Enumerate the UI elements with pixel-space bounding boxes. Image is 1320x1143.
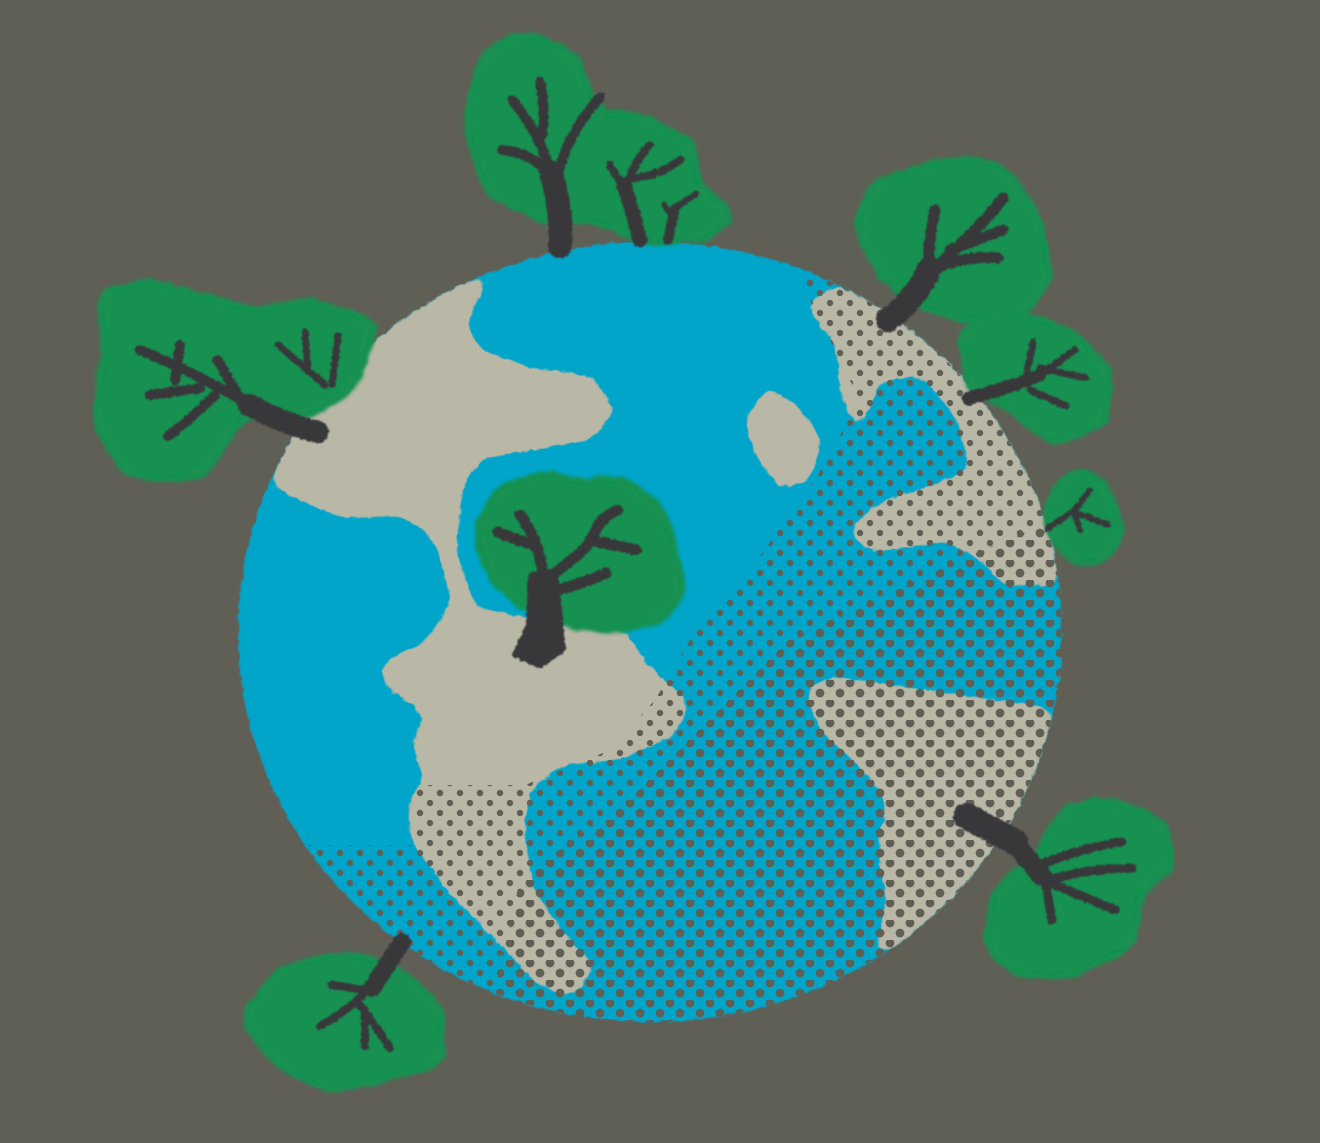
tree: lower right <box>966 796 1176 978</box>
ocean <box>238 242 1062 1022</box>
foliage <box>958 308 1114 448</box>
continent: south-east <box>807 676 1052 950</box>
foliage <box>90 278 380 482</box>
continent: west <box>262 258 690 998</box>
tree: top medium <box>610 145 680 240</box>
trunk <box>498 510 636 666</box>
island <box>744 386 822 488</box>
tree: upper right large <box>852 155 1054 324</box>
trunk <box>502 82 600 246</box>
tree: right middle <box>958 308 1114 448</box>
tree: top small <box>664 194 696 240</box>
tree: center <box>472 468 688 666</box>
halftone dots <box>308 280 1062 1022</box>
trunk <box>1047 490 1108 530</box>
tree: bottom left <box>236 942 446 1096</box>
trunk <box>140 332 338 436</box>
tree: top large <box>462 28 742 246</box>
foliage <box>472 468 688 634</box>
land masses <box>262 258 1100 1000</box>
tree: left <box>90 278 380 482</box>
foliage <box>462 28 742 246</box>
trunk <box>968 342 1085 406</box>
trunk <box>320 942 402 1048</box>
foliage <box>852 155 1054 324</box>
foliage <box>982 796 1176 978</box>
tree: right small <box>1042 464 1126 568</box>
globe <box>236 242 1064 1024</box>
illustration: globe with trees <box>91 30 1176 1094</box>
trunk <box>888 198 1003 320</box>
foliage <box>1042 464 1126 568</box>
foliage <box>236 950 446 1096</box>
continent: north-east <box>804 276 1100 588</box>
trunk <box>966 816 1132 920</box>
